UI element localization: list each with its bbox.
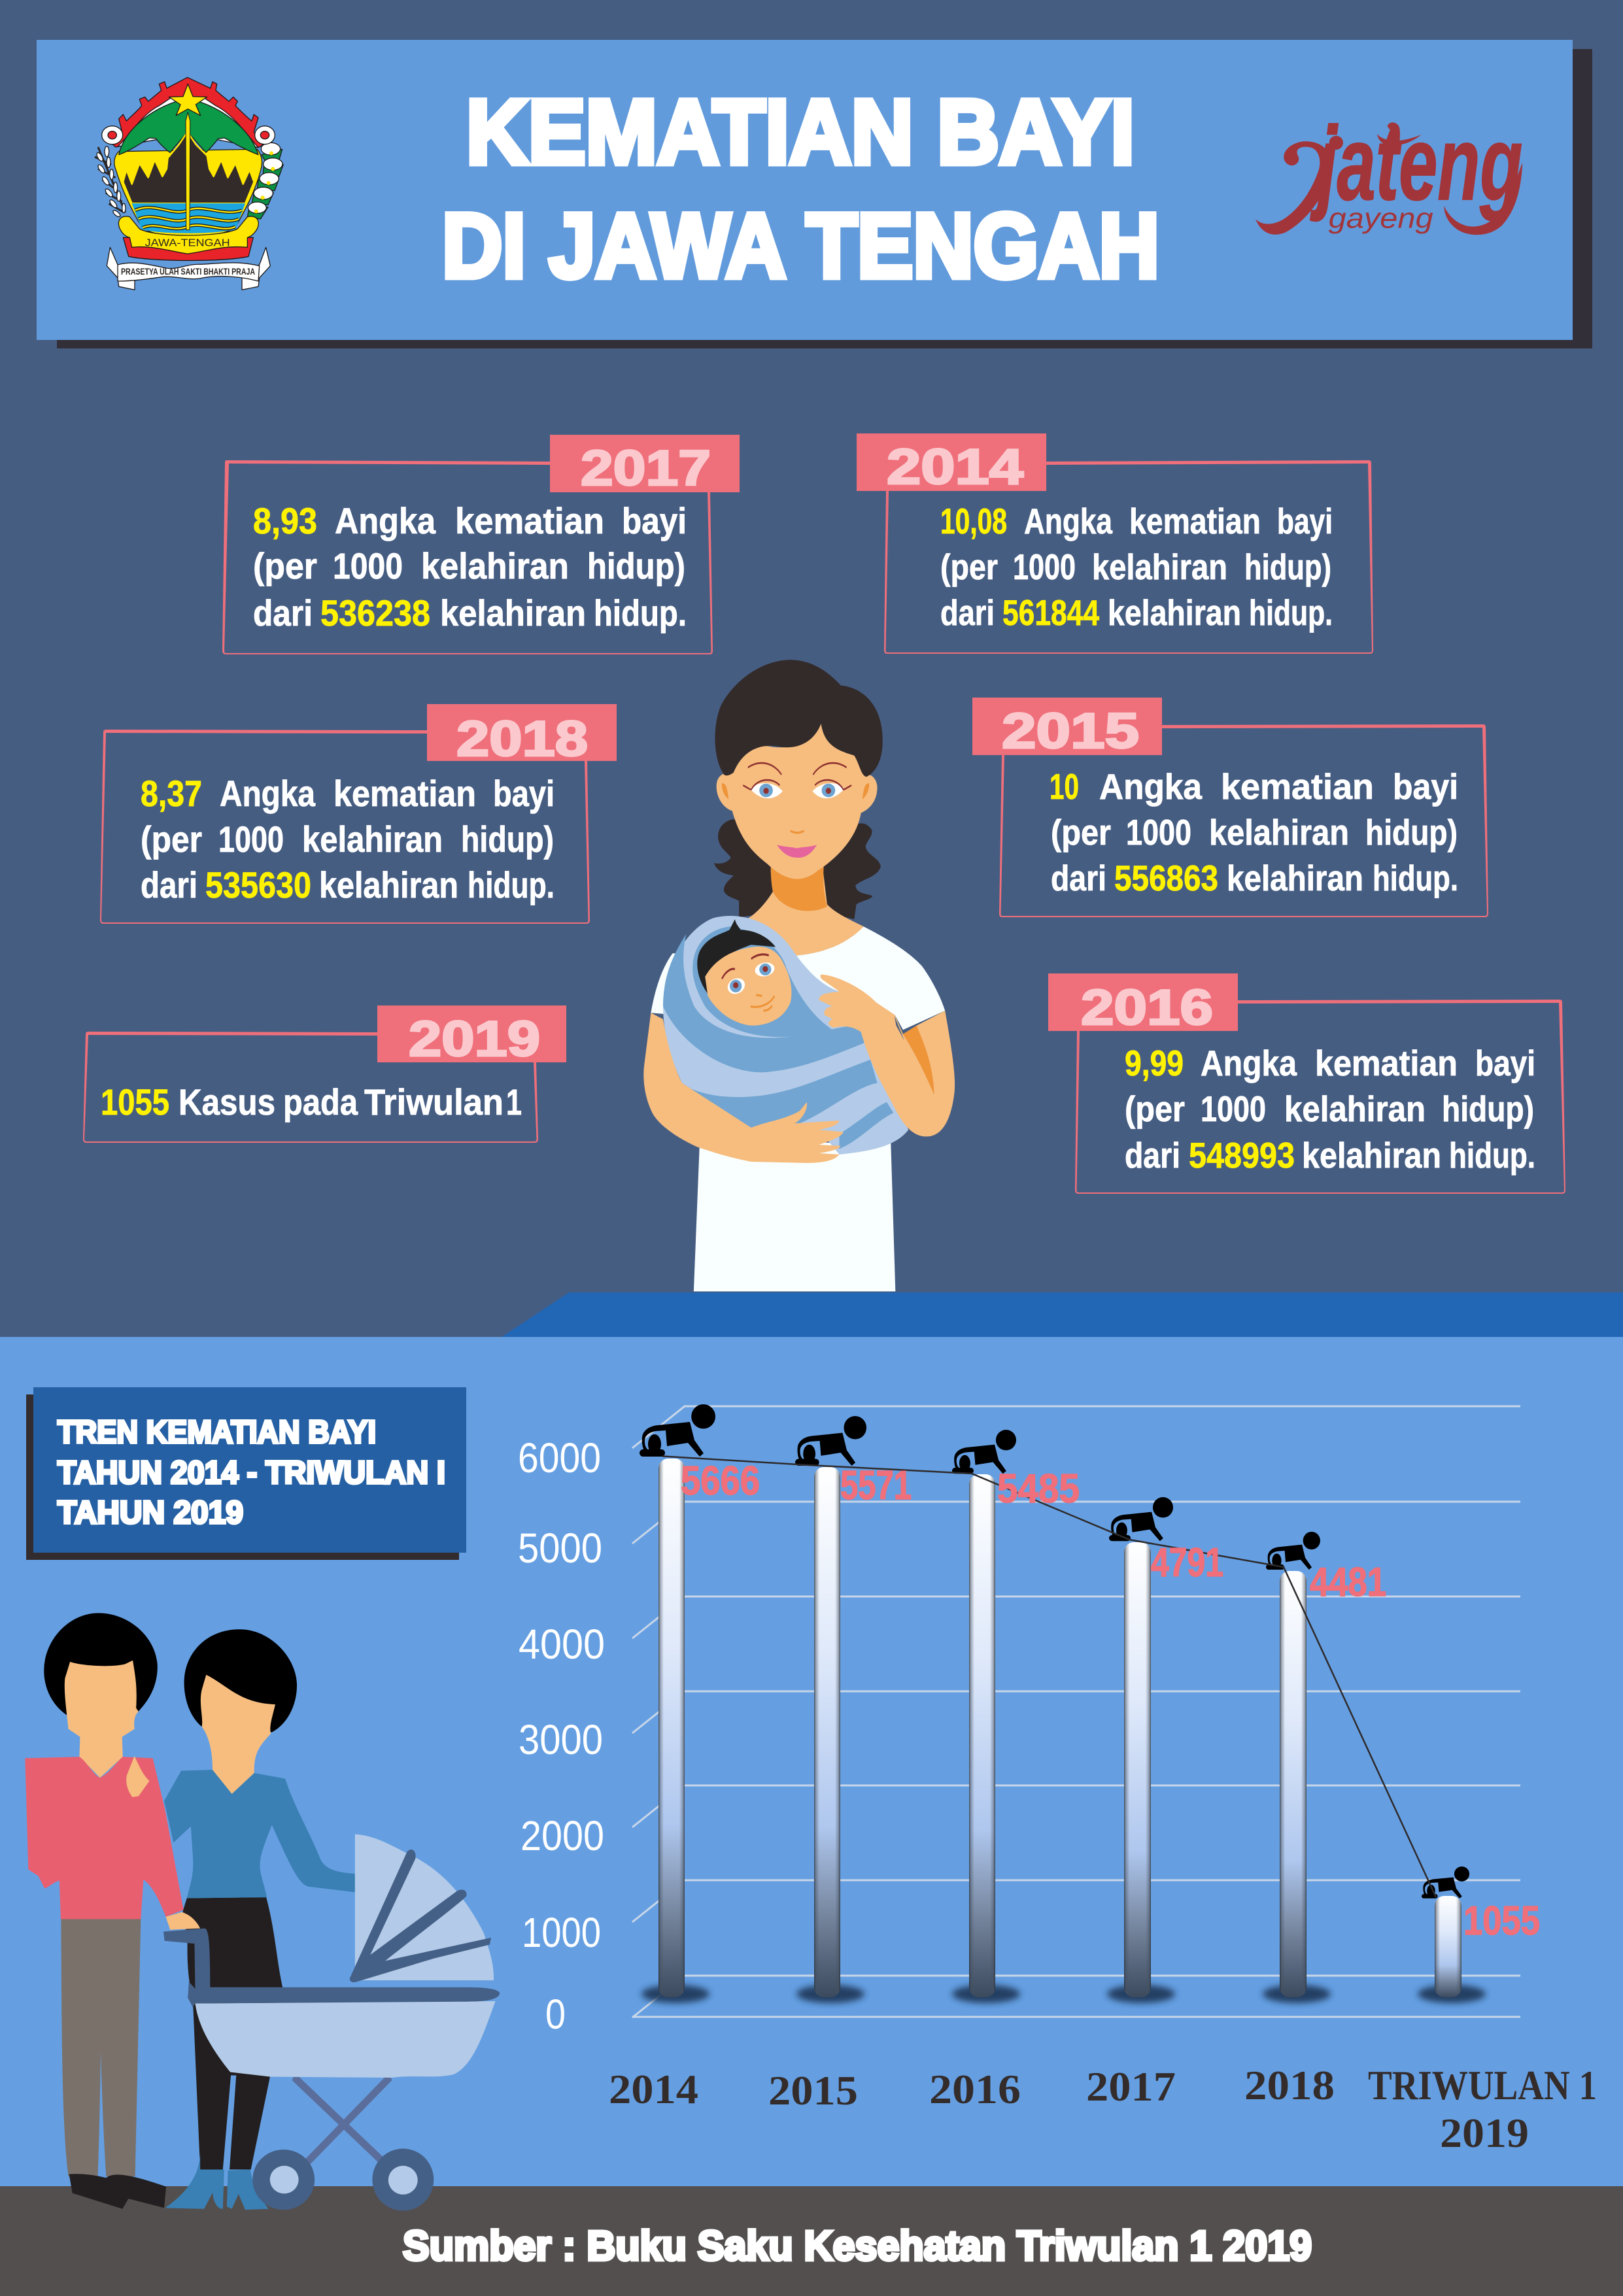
panel text: 10 [1050, 766, 1079, 807]
panel text: (per [141, 819, 202, 860]
data labels: 4791 [1151, 1540, 1223, 1585]
panel text: hidup. [1249, 592, 1333, 633]
chart: trend of infant deaths [518, 1404, 1597, 2156]
mother left arm [643, 1013, 844, 1163]
panel text: 8,37 [141, 773, 202, 814]
panel text: 536238 [320, 592, 430, 633]
panel text: kematian [1129, 501, 1261, 541]
year tag: 2017 [581, 441, 711, 496]
panel text: kematian [455, 500, 604, 541]
mother lips [777, 845, 817, 858]
banner shadow [57, 49, 1592, 348]
year tag: 2016 [1081, 980, 1213, 1036]
panel text: dari [1051, 858, 1106, 898]
data labels [681, 1459, 1540, 1944]
panel text: Triwulan [364, 1081, 504, 1123]
x axis labels: 2014 [609, 2066, 698, 2112]
chart heading box [26, 1387, 466, 1560]
panel text: kelahiran [421, 545, 569, 586]
emblem motto: PRASETYA ULAH SAKTI BHAKTI PRAJA [121, 266, 255, 277]
woman figure [164, 1629, 355, 2210]
footer bar [0, 2186, 1623, 2296]
panel text: kelahiran [1302, 1135, 1441, 1175]
panel text: kelahiran [1209, 812, 1349, 853]
panel text: bayi [493, 773, 555, 814]
bar shadows [641, 1985, 1486, 2003]
header banner [37, 40, 1592, 348]
y axis labels: 3000 [519, 1716, 603, 1763]
panel: 2016 [1048, 973, 1565, 1194]
bar 2015 [814, 1467, 840, 1997]
panel outline [884, 460, 1373, 654]
title: KEMATIAN BAYI [466, 80, 1135, 183]
panel text: Angka [1201, 1043, 1297, 1083]
bar 2017 [1124, 1542, 1151, 1997]
panel: 2019 [83, 1005, 566, 1143]
year tag [972, 698, 1162, 759]
panel text: bayi [1393, 766, 1458, 807]
panel text: 10,08 [940, 501, 1007, 541]
y axis labels: 6000 [518, 1434, 601, 1481]
panel: 2018 [100, 704, 617, 924]
chart heading box: TAHUN 2014 - TRIWULAN I [58, 1455, 445, 1491]
bar Triwulan 1 2019 [1435, 1896, 1461, 1997]
icon: Jateng Gayeng logo: jateng [1310, 105, 1522, 222]
icon: Jateng Gayeng logo [1256, 105, 1522, 235]
x axis labels: 2018 [1244, 2062, 1335, 2108]
panel: 2014 [857, 433, 1373, 654]
panel text: 1000 [333, 545, 403, 586]
panel text: kelahiran [1284, 1089, 1426, 1129]
title: DI JAWA TENGAH [442, 194, 1159, 297]
panel text: hidup) [1244, 547, 1331, 587]
panel: 2015 [972, 698, 1488, 917]
panel text: Angka [1024, 501, 1112, 541]
data labels: 5571 [840, 1463, 912, 1508]
y axis labels: 5000 [518, 1525, 602, 1572]
panel text: hidup. [1449, 1135, 1535, 1175]
chart heading box: TAHUN 2019 [58, 1495, 243, 1530]
bar 2018 [1280, 1571, 1307, 1997]
panel text: kelahiran [302, 819, 443, 860]
mother right arm [819, 975, 955, 1136]
panel text: kematian [1221, 766, 1374, 807]
logo word: gayeng: gayeng [1329, 202, 1433, 234]
panel text: hidup) [461, 819, 554, 860]
stroller [163, 1834, 500, 2211]
y axis labels: 0 [545, 1991, 566, 2038]
mother hair [715, 660, 883, 777]
emblem label: JAWA-TENGAH: JAWA-TENGAH [145, 238, 230, 249]
panel text: 9,99 [1125, 1043, 1184, 1083]
panel text [101, 1081, 522, 1123]
y axis labels [518, 1434, 605, 2038]
panel text: hidup. [594, 592, 687, 633]
panel text: (per [940, 547, 998, 587]
panel text [1050, 766, 1458, 898]
year tag: 2018 [456, 711, 588, 767]
x axis labels [609, 2062, 1597, 2156]
y axis labels: 4000 [519, 1621, 605, 1668]
panel text: kematian [333, 773, 476, 814]
baby face [697, 919, 791, 1026]
illustration: mother holding baby [643, 660, 955, 1291]
x axis labels: 2017 [1086, 2063, 1176, 2110]
panel outline [999, 724, 1488, 917]
panel outline [222, 460, 713, 654]
x axis labels: 2015 [768, 2067, 858, 2114]
background: lower section [0, 1292, 1623, 2186]
panel text: hidup. [468, 864, 555, 905]
panel text: hidup) [1442, 1089, 1534, 1129]
year tag: 2014 [887, 439, 1023, 495]
panel text [1125, 1043, 1535, 1175]
panel text: Angka [1099, 766, 1202, 807]
panel text: 8,93 [253, 500, 317, 541]
man figure [25, 1613, 200, 2209]
panel text: pada [283, 1081, 358, 1123]
mother eyes [743, 763, 851, 798]
panel text: (per [1125, 1089, 1185, 1129]
mother face [717, 724, 878, 879]
panel text: kelahiran [1227, 858, 1363, 898]
panel: 2017 [222, 435, 740, 654]
panel text: Kasus [179, 1081, 275, 1123]
panel outline [100, 730, 590, 924]
panel text: bayi [622, 500, 687, 541]
panel text: 535630 [205, 864, 311, 905]
panel text: kelahiran [440, 592, 586, 633]
panel text [141, 773, 555, 905]
panel outline [1075, 1000, 1565, 1194]
baby blanket [663, 916, 908, 1155]
panel text: dari [253, 592, 313, 633]
y axis labels: 2000 [521, 1812, 604, 1859]
year tag [1048, 973, 1238, 1036]
panel text: 1000 [1126, 812, 1191, 853]
chart heading box: TREN KEMATIAN BAYI [58, 1415, 376, 1450]
panel text: dari [1125, 1135, 1180, 1175]
y axis labels: 1000 [522, 1909, 601, 1956]
source text: Sumber : Buku Saku Kesehatan Triwulan 1 2019 [403, 2222, 1312, 2269]
panel text: (per [1051, 812, 1111, 853]
panel text: bayi [1277, 501, 1333, 541]
panel text: kelahiran [1108, 592, 1241, 633]
panel outline [83, 1032, 538, 1143]
x axis labels: 2016 [929, 2066, 1021, 2112]
panel text: 1000 [1201, 1089, 1266, 1129]
panel text: 548993 [1189, 1135, 1295, 1175]
year tag [427, 704, 617, 767]
panel text: 561844 [1002, 592, 1099, 633]
top ribbon [502, 1292, 1623, 1337]
panel text: dari [940, 592, 995, 633]
icon: Central Java coat of arms [95, 77, 283, 290]
year tag [377, 1005, 566, 1067]
x axis labels: 2019 [1440, 2110, 1529, 2156]
bar 2016 [969, 1474, 995, 1997]
panel text: hidup) [1365, 812, 1458, 853]
panel text: kelahiran [319, 864, 458, 905]
data labels: 5485 [997, 1466, 1080, 1511]
panel text: hidup) [587, 545, 685, 586]
background: upper section [0, 0, 1623, 1337]
panel text: kematian [1315, 1043, 1458, 1083]
panel text: 556863 [1114, 858, 1218, 898]
panel text: 1 [506, 1081, 522, 1123]
data labels: 4481 [1310, 1560, 1386, 1605]
illustration: parents with stroller [25, 1613, 500, 2211]
year tag [857, 433, 1046, 495]
title [442, 80, 1159, 297]
panel text: 1000 [218, 819, 284, 860]
panel text: Angka [220, 773, 316, 814]
panel text: dari [141, 864, 197, 905]
trend line [662, 1457, 1436, 1897]
panel text: 1000 [1013, 547, 1076, 587]
panel text: Angka [335, 500, 436, 541]
data labels: 5666 [681, 1459, 760, 1504]
panel text: kelahiran [1092, 547, 1227, 587]
panel text [253, 500, 687, 633]
banner panel [37, 40, 1573, 340]
year tag [550, 435, 740, 496]
panel text: (per [253, 545, 317, 586]
year tag: 2019 [409, 1011, 540, 1067]
panel text: bayi [1475, 1043, 1535, 1083]
bar 2014 [658, 1459, 685, 1997]
panel text: hidup. [1373, 858, 1458, 898]
panel text: 1055 [101, 1081, 169, 1123]
year tag: 2015 [1002, 703, 1139, 759]
icons: crawling babies [640, 1404, 1469, 1899]
data labels: 1055 [1463, 1899, 1540, 1944]
panel text [940, 501, 1333, 633]
